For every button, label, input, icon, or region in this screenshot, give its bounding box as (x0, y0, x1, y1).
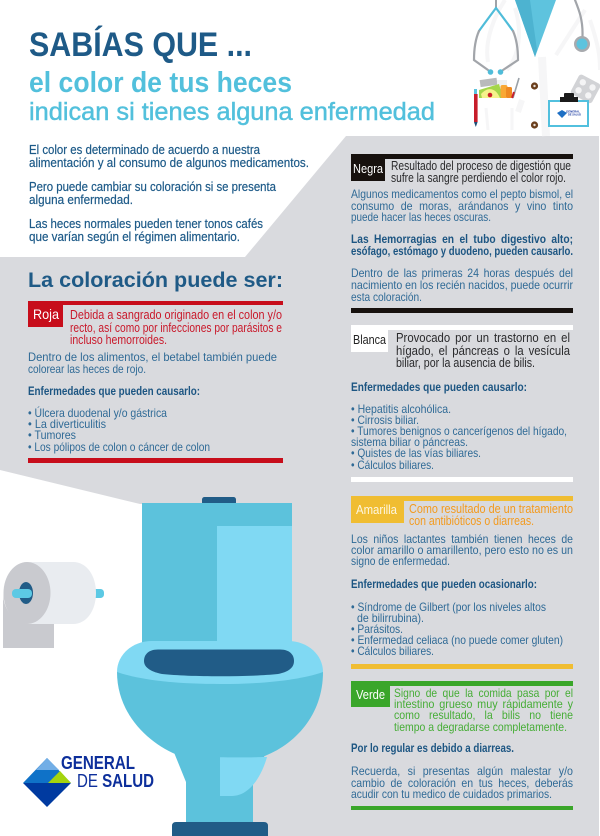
rod (12, 589, 32, 598)
amarilla body: signo de enfermedad. (351, 554, 450, 568)
toilet seat (117, 641, 323, 684)
roja tag (28, 301, 283, 327)
negra bold note (351, 232, 573, 258)
amarilla description: Como resultado de un tratamiento (409, 502, 573, 516)
blanca description (396, 331, 570, 370)
illustration: doctor coat (474, 0, 600, 136)
icon: red pen (474, 89, 478, 127)
logo: general de salud: DE SALUD (77, 771, 154, 791)
amarilla description (409, 502, 573, 528)
blanca tag: Blanca (353, 332, 387, 347)
blanca diseases heading: Enfermedades que pueden causarlo: (351, 380, 527, 394)
verde closing note: acudir con tu medico de cuidados primarios. (351, 787, 552, 801)
logo diamond (23, 758, 71, 807)
intro text block: que varían según el régimen alimentario. (29, 230, 240, 244)
roja description: recto, así como por infecciones por parásitos e (70, 321, 282, 335)
roja diseases list: • Los pólipos de colon o cáncer de colon (28, 440, 210, 454)
blanca diseases list: • Quistes de las vías biliares. (351, 446, 481, 460)
intro text block: El color es determinado de acuerdo a nuestra (29, 143, 260, 157)
amarilla body: color amarillo o amarillento, pero esto no es un (351, 543, 573, 557)
heading: la coloración: La coloración puede ser: (28, 269, 283, 292)
intro text block: alimentación y al consumo de algunos medicamentos. (29, 156, 309, 170)
blanca diseases list: sistema biliar o páncreas. (351, 435, 468, 449)
negra body: puede hacer las heces oscuras. (351, 210, 491, 224)
negra tag: Negra (353, 161, 384, 176)
icon: pocket items (479, 78, 519, 98)
coat faint folds (486, 0, 600, 136)
roja description: incluso hemorroides. (70, 333, 167, 347)
verde closing note: Recuerda, si presentas algún malestar y/o (351, 764, 573, 778)
roja diseases list (28, 405, 210, 454)
verde closing note: cambio de coloración en tus heces, deberás (351, 776, 573, 790)
title (29, 26, 292, 99)
amarilla diseases list: • Cálculos biliares. (351, 644, 434, 658)
blanca diseases list: • Cálculos biliares. (351, 458, 434, 472)
blanca diseases list: • Hepatitis alcohólica. (351, 402, 451, 416)
toilet base (172, 822, 268, 836)
blanca description: biliar, por la ausencia de bilis. (396, 356, 535, 370)
negra body (351, 187, 573, 224)
logo: general de salud (23, 753, 154, 807)
amarilla tag (351, 496, 573, 523)
verde description: Signo de que la comida pasa por el (394, 686, 573, 700)
subtitle line 2: indican si tienes alguna enfermedad (29, 98, 435, 126)
title: SABÍAS QUE ... (29, 26, 252, 64)
roja diseases heading: Enfermedades que pueden causarlo: (28, 384, 200, 398)
negra description (391, 159, 571, 185)
amarilla diseases heading: Enfermedades que pueden ocasionarlo: (351, 577, 537, 591)
negra tag (351, 154, 573, 181)
verde description: como resultado, la bilis no tiene (394, 708, 573, 722)
blanca description: hígado, el páncreas o la vesícula (396, 344, 570, 358)
icon: coat button bottom (531, 121, 538, 129)
amarilla diseases list: • Enfermedad celiaca (no puede comer gluten) (351, 633, 563, 647)
icon: coat button top (531, 82, 538, 90)
amarilla diseases list: • Síndrome de Gilbert (por los niveles altos (351, 600, 546, 614)
roja diseases list: • Tumores (28, 428, 76, 442)
toilet bowl (117, 672, 323, 757)
roja body: colorear las heces de rojo. (28, 362, 146, 376)
verde closing note (351, 764, 573, 801)
amarilla description: con antibióticos o diarreas. (409, 514, 534, 528)
panel: verde (351, 681, 573, 810)
icon: toilet (117, 497, 323, 836)
blanca diseases list: • Tumores benignos o cancerígenos del hígado, (351, 424, 567, 438)
toilet stem (173, 750, 267, 823)
amarilla diseases list: • Parásitos. (351, 622, 403, 636)
roja description: Debida a sangrado originado en el colon y/o (70, 308, 282, 322)
roja description (70, 308, 282, 347)
blanca tag (351, 325, 573, 352)
roll hole (19, 582, 33, 604)
panel: negra (351, 154, 573, 313)
toilet tank (142, 503, 292, 643)
amarilla tag: Amarilla (356, 502, 398, 517)
rod end (92, 589, 104, 598)
logo wordmark: GENERAL (61, 753, 135, 773)
verde description (394, 686, 573, 734)
roja body: Dentro de los alimentos, el betabel también puede (28, 350, 277, 364)
icon: clipboard (549, 93, 588, 126)
hanging paper (3, 593, 54, 648)
icon: clipboard: GENERAL (566, 110, 580, 114)
roja body (28, 350, 277, 376)
amarilla body: Los niños lactantes también tienen heces de (351, 532, 573, 546)
icon: stethoscope (474, 0, 590, 75)
negra newborn note: Dentro de las primeras 24 horas después del (351, 266, 573, 280)
icon: clipboard: DE SALUD (568, 112, 581, 116)
intro text block (29, 143, 309, 244)
blanca diseases list (351, 402, 567, 472)
roja tag: Roja (33, 306, 59, 322)
toilet tank button (202, 497, 236, 505)
blanca description: Provocado por un trastorno en el (396, 331, 570, 345)
negra newborn note (351, 266, 573, 304)
icon: toilet paper roll (3, 562, 104, 648)
negra newborn note: esta coloración. (351, 290, 422, 304)
negra newborn note: nacimiento en los recién nacidos, puede ocurrir (351, 278, 573, 292)
verde tag: Verde (356, 687, 385, 702)
panel: amarilla (351, 496, 573, 669)
roja diseases list: • Úlcera duodenal y/o gástrica (28, 405, 167, 420)
negra body: consumo de moras, arándanos y vino tinto (351, 199, 573, 213)
intro text block: Las heces normales pueden tener tonos cafés (29, 217, 263, 231)
amarilla body (351, 532, 573, 568)
panel: blanca (351, 325, 573, 482)
intro text block: alguna enfermedad. (29, 193, 133, 207)
verde bold note: Por lo regular es debido a diarreas. (351, 741, 514, 755)
amarilla diseases list (351, 600, 563, 658)
roll end (4, 562, 50, 624)
verde description: tiempo a degradarse completamente. (394, 720, 567, 734)
icon: pill blister (570, 74, 600, 104)
amarilla diseases list: de bilirrubina). (357, 611, 424, 625)
subtitle line 1: el color de tus heces (29, 67, 292, 99)
paper roll body (30, 562, 96, 624)
toilet opening (144, 650, 294, 676)
verde tag (351, 681, 573, 707)
blanca diseases list: • Cirrosis biliar. (351, 413, 419, 427)
panel: roja (28, 301, 283, 463)
icon: collar (515, 0, 556, 57)
negra description: sufre la sangre perdiendo el color rojo. (391, 171, 566, 185)
roja diseases list: • La diverticulitis (28, 417, 106, 431)
intro text block: Pero puede cambiar su coloración si se presenta (29, 180, 276, 194)
verde description: intestino grueso muy rápidamente y (394, 697, 573, 711)
